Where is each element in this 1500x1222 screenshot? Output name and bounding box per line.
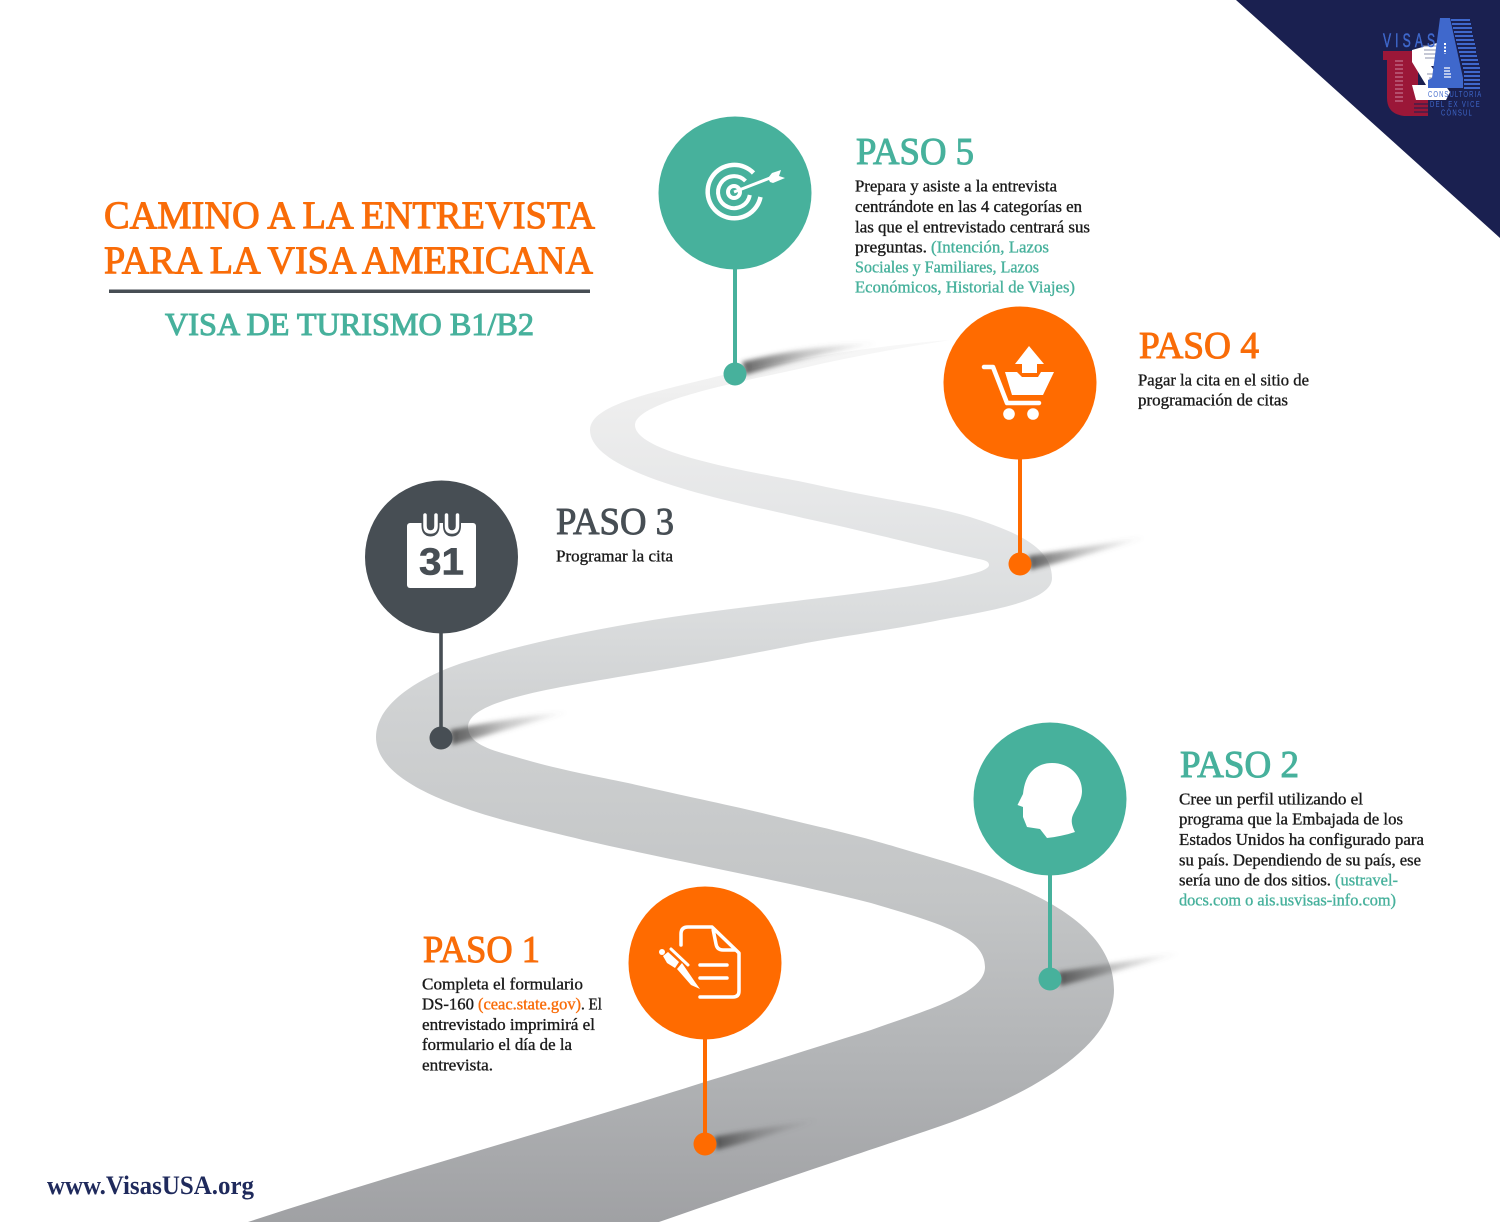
step 1 text: entrevistado imprimirá el: [422, 1015, 595, 1034]
icon: document and pen: [659, 927, 739, 997]
logo: Visas USA: CONSULTORIA: [1428, 89, 1481, 99]
step 1 text: formulario el día de la: [422, 1035, 573, 1054]
step 5 text: preguntas.: [855, 238, 927, 257]
icon: head: [1018, 763, 1082, 838]
step 4 text: PASO 4: [1139, 325, 1259, 367]
step 1 text: . El: [581, 994, 602, 1014]
step 5 text: (Intención, Lazos: [931, 238, 1049, 257]
step 2 text: docs.com o ais.usvisas-info.com): [1179, 890, 1396, 910]
step 2 text: [1179, 744, 1425, 910]
step 4 text: programación de citas: [1138, 390, 1288, 410]
step 5 text: Prepara y asiste a la entrevista: [855, 177, 1058, 196]
title: [104, 194, 595, 342]
step 2 text: (ustravel-: [1335, 870, 1398, 890]
step 1 text: PASO 1: [423, 929, 540, 971]
step 5 text: centrándote en las 4 categorías en: [855, 197, 1082, 216]
website url: www.VisasUSA.org: [47, 1171, 254, 1200]
step 2 text: su país. Dependiendo de su país, ese: [1179, 850, 1421, 870]
title: CAMINO A LA ENTREVISTA: [104, 194, 595, 237]
step 1 marker: [628, 886, 782, 1156]
step 5 text: Económicos, Historial de Viajes): [855, 278, 1075, 297]
step 1 text: entrevista.: [422, 1056, 493, 1074]
step 1 text: (ceac.state.gov): [478, 994, 581, 1014]
step 3 marker: [365, 480, 518, 750]
step 5 text: Sociales y Familiares, Lazos: [855, 258, 1039, 277]
title: PARA LA VISA AMERICANA: [104, 239, 593, 282]
logo: Visas USA: DEL EX VICE: [1430, 99, 1480, 109]
step 3 text: [556, 501, 674, 566]
winding road: [248, 340, 1114, 1222]
icon: calendar: [407, 512, 476, 588]
step 5 text: [855, 131, 1090, 297]
step 1 text: Completa el formulario: [422, 974, 583, 994]
step 1 text: DS-160: [422, 994, 474, 1014]
step 2 marker: [974, 722, 1126, 990]
step 2 text: Estados Unidos ha configurado para: [1179, 830, 1425, 849]
step 2 text: sería uno de dos sitios.: [1179, 870, 1331, 890]
step 5 text: las que el entrevistado centrará sus: [855, 218, 1090, 237]
title: VISA DE TURISMO B1/B2: [165, 306, 534, 342]
step 4 text: [1138, 325, 1309, 410]
step 2 text: Cree un perfil utilizando el: [1179, 790, 1363, 808]
icon: calendar: 31: [419, 542, 464, 584]
icon: target: [708, 165, 785, 218]
step 5 text: PASO 5: [856, 131, 974, 173]
step 1 text: [422, 929, 602, 1074]
step 4 text: Pagar la cita en el sitio de: [1138, 370, 1309, 390]
corner triangle with logo: [1236, 0, 1500, 238]
step 3 text: Programar la cita: [556, 546, 674, 566]
step 4 marker: [944, 306, 1096, 576]
step 2 text: PASO 2: [1180, 744, 1299, 786]
step 3 text: PASO 3: [556, 501, 674, 543]
logo: Visas USA: [1383, 18, 1481, 118]
icon: shopping cart: [984, 346, 1054, 420]
step 2 text: programa que la Embajada de los: [1179, 810, 1403, 828]
logo: Visas USA: VISAS: [1383, 30, 1435, 52]
step 5 marker: [658, 116, 812, 386]
road shadows: [450, 343, 1182, 1150]
logo: Visas USA: CÓNSUL: [1441, 107, 1472, 118]
